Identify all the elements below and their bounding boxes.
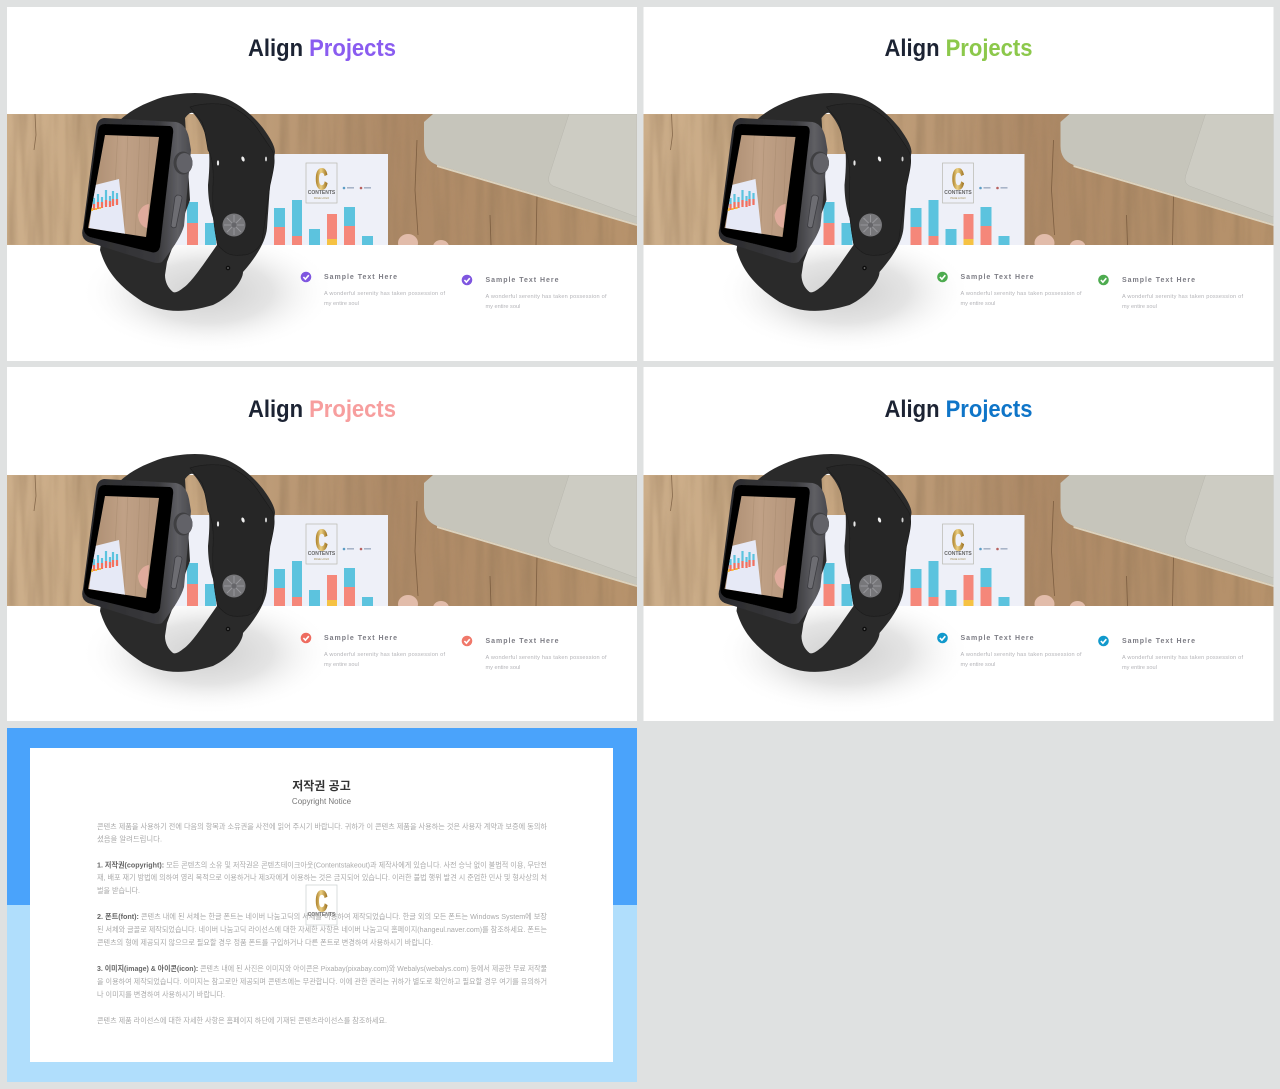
feature text 1: Sample Text Here (960, 635, 1034, 642)
feature text 2: Sample Text Here (1122, 638, 1195, 645)
logo: Contents: C (316, 525, 328, 557)
text block: license note: 콘텐츠 제품 라이선스에 대한 자세한 사항은 홈페이지 하단에 기재된 콘텐츠라이선스를 참조하세요. (97, 1015, 387, 1025)
text block: section 3 image and icon: 3. 이미지(image) & 아이콘(icon): 콘텐츠 내에 된 사진은 이미지와 아이콘은 Pixabay(pixabay.com)와 Webalys(webalys.com) 등에서 제공한 무료 저작물 (97, 963, 547, 973)
panel: slide 2 green (644, 7, 1274, 361)
feature text 2: Sample Text Here (1122, 277, 1195, 284)
feature text 1: Sample Text Here (324, 635, 397, 642)
feature text 1 (324, 635, 445, 668)
logo: Contents (306, 163, 337, 203)
logo: Contents: CONTENTS (944, 551, 972, 557)
check icon 1 (937, 272, 948, 282)
panel: slide 4 blue (644, 367, 1274, 721)
check icon 1 (937, 633, 948, 643)
feature text 2: A wonderful serenity has taken possession of (486, 655, 607, 661)
watch mockup (719, 454, 912, 672)
feature text 1 (960, 274, 1082, 307)
feature text 2: my entire soul (486, 304, 520, 310)
logo: Contents (942, 524, 974, 564)
text block: section 1 copyright (97, 860, 547, 895)
logo: Contents: PAGE LOGO (950, 557, 966, 561)
logo: Contents watermark: CONTENTS (308, 912, 336, 918)
text block: section 1 copyright: 1. 저작권(copyright): 모든 콘텐츠의 소유 및 저작권은 콘텐츠테이크아웃(Contentstakeout)과 제작사에게 있습니다. 사전 승낙 없이 불법적 이용, 무단전 (97, 860, 547, 870)
check icon 2 (462, 275, 472, 285)
text block: section 3 image and icon: 나 이미지를 변경하여 사용하시기 바랍니다. (97, 989, 225, 999)
logo: Contents (306, 524, 337, 564)
feature text 2: A wonderful serenity has taken possession of (1122, 294, 1243, 300)
feature text 1: my entire soul (960, 301, 995, 307)
feature text 1: Sample Text Here (960, 274, 1034, 281)
text block: section 3 image and icon (97, 963, 547, 999)
text block: section 2 font (97, 911, 547, 947)
feature text 1: Sample Text Here (324, 274, 397, 281)
feature text 2 (1122, 277, 1243, 310)
feature text 2: my entire soul (1122, 665, 1157, 671)
text block: introduction: 콘텐츠 제품을 사용하기 전에 다음의 항목과 소유권을 사전에 읽어 주시기 바랍니다. 귀하가 이 콘텐츠 제품을 사용하는 것은 사용자 계약과 보증에 동의하 (97, 821, 547, 831)
logo: Contents: PAGE LOGO (314, 196, 329, 200)
text block: introduction (97, 821, 547, 844)
photo banner: desk with report and laptop (7, 114, 637, 254)
feature text 1: A wonderful serenity has taken possession of (960, 291, 1082, 297)
panel: slide 1 purple (7, 7, 637, 361)
logo: Contents: C (316, 164, 328, 196)
logo: Contents: C (952, 164, 964, 196)
feature text 1: A wonderful serenity has taken possession of (324, 291, 445, 297)
logo: Contents: CONTENTS (308, 190, 336, 196)
watch mockup (82, 454, 275, 672)
logo: Contents: CONTENTS (308, 551, 336, 557)
text block: section 2 font: 콘텐츠의 형에 제공되지 않으므로 필요할 경우 정품 폰트를 구입하거나 다른 폰트로 변경하여 사용하시기 바랍니다. (97, 937, 433, 947)
panel: slide 3 pink (7, 367, 637, 721)
photo banner: desk with report and laptop (644, 475, 1274, 615)
panel: copyright notice slide (7, 728, 637, 1082)
photo banner: desk with report and laptop (7, 475, 637, 615)
text block: section 2 font: 2. 폰트(font): 콘텐츠 내에 된 서체는 한글 폰트는 네이버 나눔고딕의 서체를 이용하여 제작되었습니다. 한글 외의 모든 폰트는 Windows System에 보장 (97, 911, 547, 921)
feature text 2 (486, 638, 607, 671)
logo: Contents: C (952, 525, 964, 557)
feature text 1 (960, 635, 1082, 668)
feature text 2 (1122, 638, 1243, 671)
logo: Contents: CONTENTS (944, 190, 972, 196)
text block: section 2 font: 된 서체와 글꼴로 제작되었습니다. 네이버 나눔고딕 라이선스에 대한 자세한 사항은 네이버 나눔고딕 홈페이지(hangeul.naver.com)를 참조하세요. 폰트는 (97, 924, 547, 934)
photo banner: desk with report and laptop (644, 114, 1274, 254)
logo: Contents: PAGE LOGO (950, 196, 966, 200)
logo: Contents (942, 163, 974, 203)
watch mockup (82, 93, 275, 311)
feature text 2: Sample Text Here (486, 638, 559, 645)
title: Align Projects purple: Align Projects (248, 35, 396, 62)
feature text 1: my entire soul (324, 662, 359, 668)
heading: copyright notice: 저작권 공고 (292, 778, 351, 793)
feature text 1: A wonderful serenity has taken possession of (324, 652, 445, 658)
heading: copyright notice (292, 778, 352, 806)
check icon 1 (301, 633, 311, 643)
text block: introduction: 셨음을 알려드립니다. (97, 834, 162, 844)
check icon 2 (1098, 275, 1109, 285)
check icon 1 (301, 272, 311, 282)
check icon 2 (1098, 636, 1109, 646)
feature text 2: my entire soul (486, 665, 520, 671)
logo: Contents watermark (306, 885, 337, 925)
feature text 2: A wonderful serenity has taken possession of (1122, 655, 1243, 661)
heading: copyright notice: Copyright Notice (292, 797, 352, 806)
text block: section 1 copyright: 벌을 받습니다. (97, 885, 140, 895)
feature text 2 (486, 277, 607, 310)
check icon 2 (462, 636, 472, 646)
title: Align Projects green: Align Projects (884, 35, 1032, 62)
logo: Contents watermark: C (316, 886, 328, 918)
feature text 1 (324, 274, 445, 307)
feature text 2: A wonderful serenity has taken possession of (486, 294, 607, 300)
feature text 2: Sample Text Here (486, 277, 559, 284)
watch mockup (719, 93, 912, 311)
title: Align Projects blue: Align Projects (884, 396, 1032, 423)
text block: section 3 image and icon: 을 이용하여 제작되었습니다. 이미지는 참고로만 제공되며 콘텐츠에는 무관합니다. 이에 관한 권리는 귀하가 별도로 확인하고 필요할 경우 여기를 유의하거 (97, 976, 547, 986)
logo: Contents: PAGE LOGO (314, 557, 329, 561)
feature text 1: A wonderful serenity has taken possession of (960, 652, 1082, 658)
text block: section 1 copyright: 재, 배포 재기 방법에 의하여 영리 목적으로 이용하거나 제3자에게 이용하는 것은 금지되어 있습니다. 이러한 불법 행위 발견 시 준엄한 민사 및 형사상의 처 (97, 872, 547, 882)
feature text 2: my entire soul (1122, 304, 1157, 310)
title: Align Projects pink: Align Projects (248, 396, 396, 423)
feature text 1: my entire soul (324, 301, 359, 307)
feature text 1: my entire soul (960, 662, 995, 668)
